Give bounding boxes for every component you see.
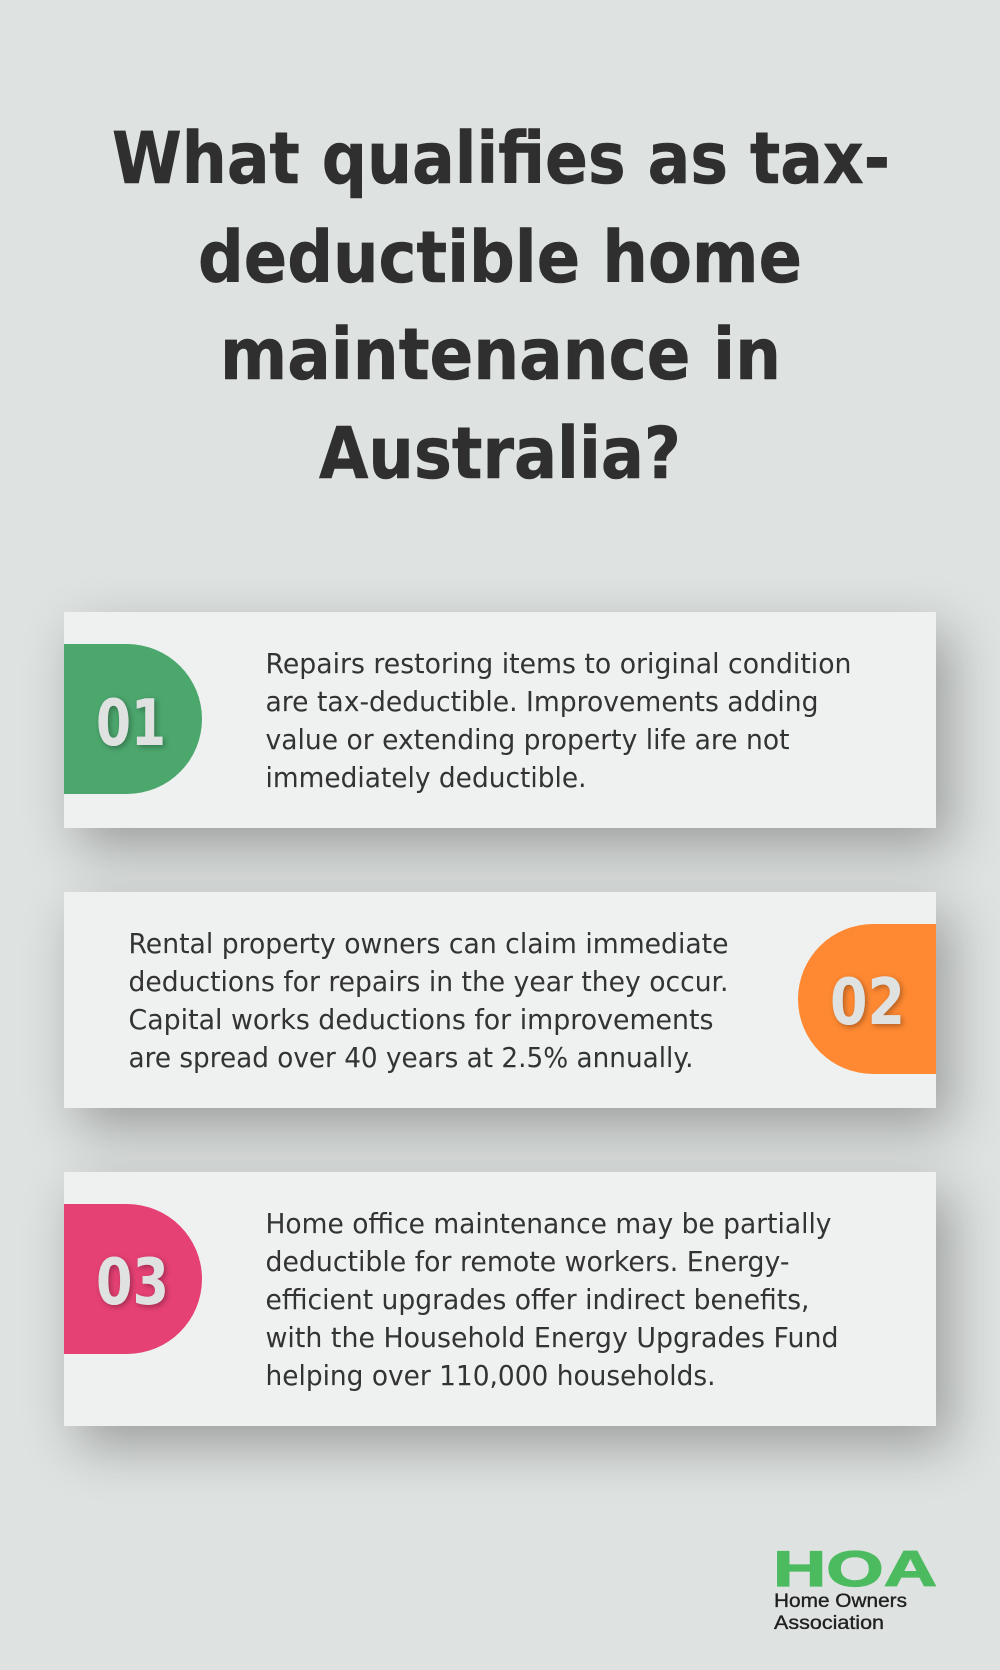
badge: 03 bbox=[64, 1204, 202, 1354]
badge: 01 bbox=[64, 644, 202, 794]
text block: card 02: deductions for repairs in the year they occur. bbox=[128, 966, 728, 998]
panel: card 01 repairs vs improvements bbox=[64, 612, 936, 828]
text block: card 01: immediately deductible. bbox=[266, 762, 586, 794]
text block: card 03: deductible for remote workers. Energy- bbox=[266, 1246, 790, 1278]
badge: 02 bbox=[798, 924, 936, 1074]
panel: card 03 home office and energy bbox=[64, 1172, 936, 1426]
text block: card 03 bbox=[266, 1208, 838, 1392]
text block: card 02: Rental property owners can claim immediate bbox=[128, 928, 728, 960]
text block: card 03: with the Household Energy Upgrades Fund bbox=[266, 1322, 838, 1354]
title: maintenance in bbox=[220, 313, 781, 396]
title: What qualifies as tax- bbox=[112, 117, 890, 200]
text block: card 01: value or extending property life are not bbox=[266, 724, 790, 756]
badge: 03: 03 bbox=[96, 1246, 169, 1320]
text block: card 02: are spread over 40 years at 2.5% annually. bbox=[128, 1042, 694, 1074]
panel: card 02 rental property bbox=[64, 892, 936, 1108]
title: Australia? bbox=[319, 412, 681, 495]
title bbox=[112, 117, 890, 495]
logo: HOA Home Owners Association: HOA bbox=[773, 1541, 937, 1597]
text block: card 01: are tax-deductible. Improvements adding bbox=[266, 686, 818, 718]
text block: card 03: helping over 110,000 households. bbox=[266, 1360, 716, 1392]
title: deductible home bbox=[198, 216, 802, 299]
text block: card 01: Repairs restoring items to original condition bbox=[266, 648, 852, 680]
badge: 01: 01 bbox=[96, 687, 166, 761]
text block: card 01 bbox=[266, 648, 852, 794]
text block: card 02: Capital works deductions for improvements bbox=[128, 1004, 714, 1036]
text block: card 02 bbox=[128, 928, 728, 1074]
text block: card 03: efficient upgrades offer indirect benefits, bbox=[266, 1284, 810, 1316]
logo: HOA Home Owners Association: Home Owners bbox=[774, 1590, 907, 1612]
badge: 02: 02 bbox=[830, 966, 905, 1040]
text block: card 03: Home office maintenance may be partially bbox=[266, 1208, 832, 1240]
logo: HOA Home Owners Association: Association bbox=[774, 1612, 884, 1634]
logo: HOA Home Owners Association bbox=[773, 1541, 937, 1634]
